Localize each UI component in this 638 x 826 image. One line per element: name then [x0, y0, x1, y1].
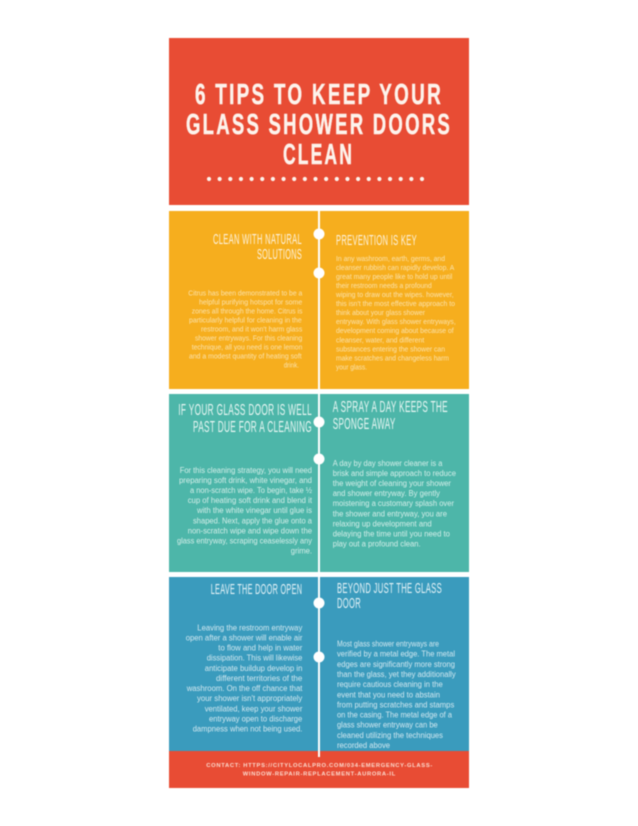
text: cleaning strategy body: [177, 466, 313, 555]
text: contact: CONTACT: HTTPS://CITYLOCALPRO.COM/034-EMERGENCY-GLASS-: [206, 763, 432, 769]
text: leave the door open body: dissipation. This will likewise: [207, 654, 302, 663]
text: leave the door open body: [186, 623, 303, 734]
text: prevention body: this isn't the most effective approach to: [336, 301, 455, 308]
title: GLASS SHOWER DOORS: [186, 109, 452, 141]
text: metal edge body: event that you need to abstain: [337, 690, 440, 699]
text: daily cleaner body: delaying the time until you need to: [333, 529, 451, 538]
text: metal edge body: verified by a metal edge. The metal: [337, 650, 455, 659]
text: prevention body: development coming about because of: [336, 328, 454, 335]
text: contact: WINDOW-REPAIR-REPLACEMENT-AURORA-IL: [243, 772, 396, 778]
text: metal edge body: edges are significantly more strong: [337, 660, 455, 669]
text: leave the door open body: ventilated, keep your shower: [205, 704, 303, 713]
panel: teal tips: [169, 394, 469, 572]
text: citrus body: [188, 290, 303, 370]
text: prevention body: think about your glass shower: [336, 310, 426, 317]
text: cleaning strategy body: non-scratch wipe and wipe down the: [188, 526, 312, 535]
text: leave the door open body: dampness when not being used.: [193, 725, 302, 734]
text: cleaning strategy body: preparing soft drink, white vinegar, and: [179, 476, 312, 485]
text: leave the door open body: different territories of the: [216, 674, 302, 683]
text: daily cleaner body: relaxing up development and: [333, 519, 432, 528]
text: cleaning strategy body: with the white vinegar until glue is: [196, 506, 312, 515]
panel: blue tips: [169, 577, 469, 752]
text: daily cleaner body: play out a profound clean.: [333, 539, 421, 548]
dotted row: [207, 177, 424, 181]
text: prevention body: cleanser, water, and different: [336, 337, 424, 344]
text: metal edge body: from putting scratches and stamps: [337, 700, 454, 709]
text: leave the door open body: open after a shower will enable air: [186, 633, 303, 642]
heading: beyond just the glass door: DOOR: [337, 596, 361, 612]
text: prevention body: entryway. With glass shower entryways,: [336, 319, 456, 326]
text: cleaning strategy body: a non-scratch wipe. To begin, take ½: [190, 486, 312, 495]
text: cleaning strategy body: shaped. Next, apply the glue onto a: [193, 516, 313, 525]
text: citrus body: Citrus has been demonstrated to be a: [188, 290, 302, 298]
text: citrus body: zones all through the home. Citrus is: [192, 308, 303, 316]
text: metal edge body: recorded above: [337, 741, 390, 750]
heading: if your glass door is well past due: [178, 402, 312, 436]
text: daily cleaner body: brisk and simple approach to reduce: [333, 469, 456, 478]
text: contact: [206, 763, 432, 778]
text: prevention body: make scratches and changeless harm: [336, 355, 449, 362]
text: daily cleaner body: the shower and entryway, you are: [333, 509, 447, 518]
text: daily cleaner body: A day by day shower cleaner is a: [333, 459, 443, 468]
heading: beyond just the glass door: BEYOND JUST THE GLASS: [337, 581, 442, 597]
heading: if your glass door is well past due: IF YOUR GLASS DOOR IS WELL: [178, 402, 312, 419]
text: prevention body: substances entering the shower can: [336, 346, 445, 353]
text: cleaning strategy body: cup of heating soft drink and blend it: [188, 496, 313, 505]
heading: beyond just the glass door: [337, 581, 442, 612]
text: leave the door open body: entryway open to discharge: [209, 714, 302, 724]
text: daily cleaner body: [333, 459, 456, 548]
heading: a spray a day: SPONGE AWAY: [333, 416, 396, 433]
text: daily cleaner body: and shower entryway. By gently: [333, 489, 440, 498]
text: prevention body: your glass.: [336, 364, 367, 371]
heading: a spray a day: A SPRAY A DAY KEEPS THE: [333, 399, 448, 416]
text: prevention body: cleanser rubbish can rapidly develop. A: [336, 265, 455, 272]
text: metal edge body: require cautious cleaning in the: [337, 680, 443, 689]
text: prevention body: their restroom needs a profound: [336, 283, 432, 290]
text: citrus body: helpful purifying hotspot for some: [199, 300, 302, 306]
text: cleaning strategy body: glass entryway, scraping ceaselessly any: [177, 536, 312, 545]
title: CLEAN: [283, 139, 354, 171]
text: leave the door open body: anticipate buildup develop in: [205, 664, 302, 673]
heading: clean with natural solutions: CLEAN WITH NATURAL: [213, 232, 302, 248]
text: daily cleaner body: the weight of cleaning your shower: [333, 479, 451, 488]
title: 6 TIPS TO KEEP YOUR: [195, 79, 443, 111]
heading: a spray a day: [333, 399, 448, 433]
text: prevention body: wiping to draw out the wipes. however,: [335, 292, 454, 299]
text: metal edge body: cleaned utilizing the techniques: [337, 731, 443, 740]
text: metal edge body: [337, 640, 456, 750]
text: citrus body: and a modest quantity of heating soft: [189, 354, 302, 360]
panel: yellow tips: [169, 211, 469, 389]
panel: contact footer: [169, 751, 469, 788]
heading: prevention is key: PREVENTION IS KEY: [336, 233, 417, 249]
title: [186, 79, 452, 171]
text: leave the door open body: to flow and help in water: [218, 644, 303, 653]
text: prevention body: great many people like to hold up until: [336, 274, 453, 281]
panel: header: [169, 38, 469, 205]
text: metal edge body: glass shower entryway can be: [337, 721, 438, 730]
text: citrus body: restroom, and it won't harm glass: [201, 326, 303, 334]
heading: clean with natural solutions: [213, 232, 302, 263]
text: cleaning strategy body: For this cleaning strategy, you will need: [180, 466, 312, 475]
text: prevention body: [335, 256, 456, 371]
timeline divider: [314, 205, 324, 757]
text: prevention body: In any washroom, earth, germs, and: [336, 256, 445, 263]
text: metal edge body: Most glass shower entryways are: [337, 640, 439, 649]
text: citrus body: particularly helpful for cleaning in the: [189, 318, 302, 324]
heading: leave the door open: LEAVE THE DOOR OPEN: [211, 582, 302, 598]
text: citrus body: technique, all you need is one lemon: [192, 344, 302, 352]
text: metal edge body: than the glass, yet they additionally: [337, 670, 456, 679]
text: cleaning strategy body: grime.: [291, 546, 312, 555]
text: daily cleaner body: moistening a customary splash over: [333, 499, 454, 508]
text: citrus body: drink.: [284, 362, 299, 370]
text: leave the door open body: your shower isn't appropriately: [197, 694, 302, 703]
text: leave the door open body: Leaving the restroom entryway: [197, 623, 302, 632]
heading: clean with natural solutions: SOLUTIONS: [257, 247, 302, 263]
heading: if your glass door is well past due: PAST DUE FOR A CLEANING: [193, 419, 312, 436]
text: citrus body: shower entryways. For this cleaning: [195, 336, 302, 342]
text: metal edge body: on the casing. The metal edge of a: [337, 710, 453, 720]
text: leave the door open body: washroom. On the off chance that: [186, 684, 303, 693]
